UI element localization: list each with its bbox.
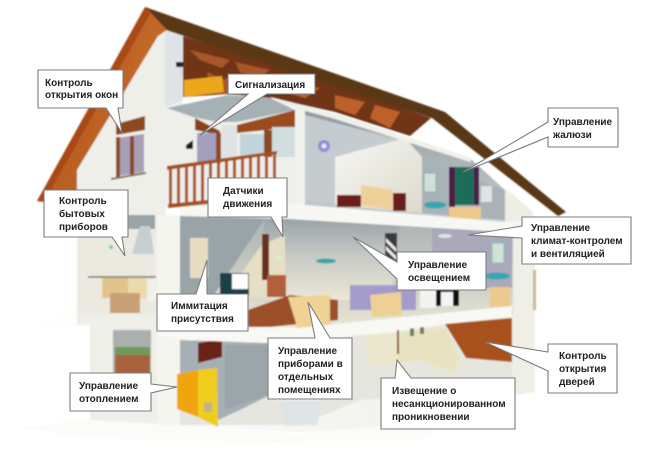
callout: room appliances: помещениях [278, 385, 341, 396]
right bath [492, 243, 504, 263]
callout: alarm: Сигнализация [235, 80, 305, 91]
bath mirror and basin [424, 173, 436, 192]
white column [157, 215, 180, 425]
attic yellow box [184, 76, 224, 97]
balcony block [166, 95, 295, 208]
callout: presence imitation [157, 260, 248, 331]
callout: intrusion: несанкционированном [392, 399, 506, 410]
callout: presence imitation: присутствия [171, 314, 234, 325]
callout: blinds [463, 108, 618, 172]
garage door [445, 318, 512, 362]
upper column [165, 31, 183, 107]
gable window [111, 116, 146, 180]
callout: climate control: Управление [531, 223, 591, 234]
callout: doors [485, 342, 617, 393]
basement interior [180, 325, 512, 426]
callout: intrusion: проникновении [392, 412, 470, 423]
callout: lighting: Управление [408, 260, 468, 271]
balcony sensor [186, 140, 193, 149]
callout: lighting: освещением [408, 273, 470, 284]
callout: intrusion: Извещение о [392, 386, 456, 397]
house illustration [15, 7, 566, 442]
middle floor interior [180, 214, 513, 330]
black TV right [436, 288, 459, 306]
tower wall [513, 222, 535, 395]
purple sofa room [350, 285, 416, 310]
callout: window control: открытия окон [45, 90, 118, 101]
callout: heating: отоплением [79, 394, 139, 405]
blind window [449, 167, 478, 205]
main left wall [77, 30, 183, 425]
green lamp [275, 255, 281, 261]
callout: room appliances: отдельных [278, 372, 334, 383]
boiler [177, 368, 218, 427]
callout: appliances [44, 190, 128, 256]
balcony railing [167, 151, 277, 208]
callout: motion sensors: движения [223, 199, 272, 210]
callout: motion sensors: Датчики [223, 186, 264, 197]
callout: window control [38, 70, 123, 133]
callout: climate control: климат-контролем [531, 236, 623, 247]
callout: heating: Управление [79, 381, 139, 392]
callout: heating [70, 373, 177, 411]
callout: room appliances: Управление [278, 346, 338, 357]
left roof wood underside [37, 7, 167, 205]
callout: doors: Контроль [559, 351, 607, 362]
rust floor [248, 295, 338, 327]
callout: appliances: приборов [59, 221, 108, 233]
callout: doors: открытия [559, 364, 606, 375]
TV [220, 273, 249, 295]
vent pipe [176, 63, 201, 78]
callout: climate control [468, 217, 631, 264]
ground floor base [15, 300, 535, 442]
callouts [38, 70, 631, 429]
callout: blinds: Управление [553, 117, 613, 128]
left basement room [113, 330, 151, 375]
callout: climate control: и вентиляцией [531, 249, 605, 260]
teal lamp [316, 258, 336, 264]
callout: intrusion [381, 360, 515, 429]
callout: presence imitation: Иммитация [171, 301, 228, 312]
cabinet stack [262, 234, 269, 280]
callout: motion sensors [208, 178, 287, 237]
callout: blinds: жалюзи [552, 130, 592, 141]
callout: window control: Контроль [45, 78, 93, 89]
callout: room appliances [268, 302, 352, 399]
floor slab middle [157, 306, 512, 343]
callout: lighting [353, 237, 486, 290]
attic rafters [183, 36, 431, 136]
kitchen [77, 215, 156, 315]
callout: appliances: Контроль [59, 196, 107, 207]
attic room [270, 97, 533, 222]
stair hatch [385, 233, 397, 262]
sphere lamp [318, 140, 330, 152]
right roof [145, 7, 566, 216]
floor slab upper [180, 204, 533, 232]
callout: room appliances: приборами в [278, 358, 343, 370]
callout: alarm [200, 74, 315, 135]
red sofa and radiator [337, 195, 361, 207]
callout: appliances: бытовых [59, 208, 105, 220]
callout: doors: дверей [559, 377, 595, 388]
